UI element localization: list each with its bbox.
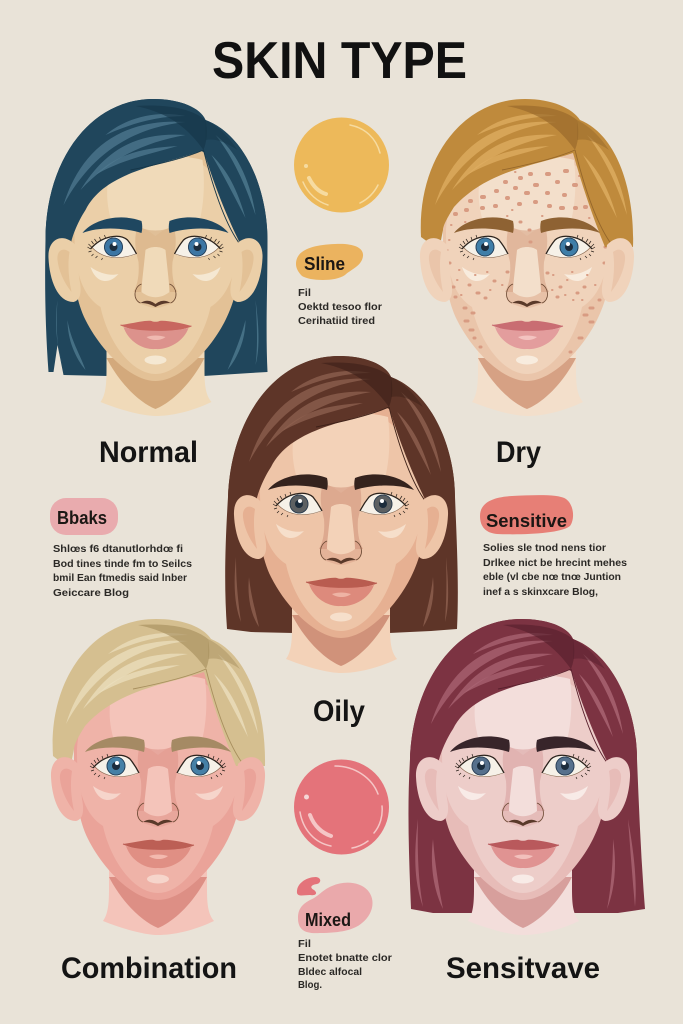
text block: Mixed description: Blog. (298, 980, 322, 991)
text block: Mixed description (298, 939, 392, 991)
text block: Sensitive description: inef a s skinxcare Blog, (483, 587, 598, 598)
face skin: normal (71, 140, 242, 381)
face skin: dry (443, 140, 613, 381)
tag: Sensitive: Sensitive (486, 511, 567, 531)
text block: Sensitive description (483, 543, 627, 598)
face: dry (420, 99, 634, 416)
text block: Sensitive description: Solies sle tnod nens tior (483, 543, 606, 554)
hair front: sensitive (410, 619, 637, 769)
ears: combination (51, 757, 265, 821)
text block: Bbaks description: Geiccare Blog (53, 588, 129, 599)
left eye: oily (273, 492, 322, 517)
neck: dry (472, 350, 583, 416)
label: Sensitvave: Sensitvave (446, 952, 600, 985)
text block: Mixed description: Bldec alfocal (298, 967, 362, 978)
ears: sensitive (416, 757, 630, 821)
hair back: sensitive (408, 619, 645, 913)
face: oily (225, 356, 458, 673)
tag: Mixed: Mixed (305, 910, 351, 930)
text block: Bbaks description: Bod tines tinde fm to Seilcs (53, 559, 192, 570)
nose: oily (320, 504, 362, 565)
text block: Mixed description: Enotet bnatte clor (298, 953, 392, 964)
right eye: sensitive (542, 754, 591, 779)
text block: Bbaks description: bmil Ean ftmedis said lnber (53, 573, 187, 584)
hair: combination (53, 619, 265, 769)
face: combination (51, 619, 265, 935)
left eye: normal (88, 235, 136, 260)
label: Normal: Normal (99, 436, 198, 469)
title: SKIN TYPE (212, 32, 467, 90)
freckles: dry (447, 171, 606, 352)
lower hair strands: oily (235, 557, 448, 627)
face: sensitive (408, 619, 645, 935)
label: Oily: Oily (313, 695, 365, 728)
hair strands: oily (249, 363, 441, 502)
hair strands: combination (66, 625, 258, 764)
icon: pink oil bubble (294, 760, 389, 854)
neck: sensitive (468, 869, 579, 935)
hair strands: sensitive (431, 625, 623, 764)
face skin: oily (257, 397, 427, 638)
hair: dry (421, 99, 633, 250)
label: Combination: Combination (61, 952, 237, 985)
eyebrows: combination (85, 736, 231, 752)
lips: sensitive (488, 840, 559, 868)
hair strands: dry (435, 106, 627, 245)
right eye: normal (174, 235, 224, 260)
neck: normal (100, 350, 212, 416)
lips: dry (492, 321, 563, 349)
nose: combination (137, 766, 179, 827)
hair front: oily (228, 356, 455, 507)
text block: Sline description: Cerihatiid tired (298, 316, 375, 327)
text block: Mixed description: Fil (298, 939, 311, 950)
ears: oily (234, 495, 448, 559)
hair strands: normal (64, 106, 256, 245)
text block: Sensitive description: eble (vl cbe nœ tnœ Juntion (483, 572, 621, 583)
face skin: sensitive (439, 659, 609, 900)
icon: yellow oil bubble (294, 118, 389, 212)
eyebrows: normal (82, 217, 228, 233)
label: Dry: Dry (496, 436, 541, 469)
right eye: oily (360, 492, 409, 517)
left eye: combination (90, 754, 139, 779)
eyebrows: oily (268, 474, 414, 490)
ears: normal (48, 238, 263, 302)
text block: Sline description: Fil (298, 288, 311, 299)
tag: Bbaks (50, 498, 118, 535)
text block: Bbaks description (53, 544, 192, 599)
neck: combination (103, 869, 214, 935)
nose: dry (506, 247, 548, 308)
hair back: oily (225, 356, 458, 633)
nose: normal (134, 247, 176, 308)
text block: Sensitive description: Drlkee nict be hrecint mehes (483, 558, 627, 569)
tag: Bbaks: Bbaks (57, 508, 107, 528)
face: normal (45, 99, 268, 416)
tag: Mixed (297, 877, 373, 933)
hair front: normal (46, 99, 268, 250)
text block: Sline description: Oektd tesoo flor (298, 302, 382, 313)
lower hair strands: sensitive (415, 819, 636, 909)
ears: dry (420, 238, 634, 302)
left eye: sensitive (455, 754, 504, 779)
lips: oily (306, 578, 377, 606)
eyebrows: sensitive (450, 736, 596, 752)
text block: Sline description (298, 288, 382, 327)
text block: Bbaks description: Shlœs f6 dtanutlorhdœ fi (53, 544, 183, 555)
hair back: normal (45, 99, 268, 376)
tag: Sline (296, 244, 363, 280)
tag: Sensitive (480, 495, 573, 534)
tag: Sline: Sline (304, 254, 345, 274)
right eye: combination (177, 754, 226, 779)
left eye: dry (459, 235, 508, 260)
neck: oily (286, 607, 397, 673)
eyebrows: dry (454, 217, 600, 233)
lips: combination (123, 840, 194, 868)
nose: sensitive (502, 766, 544, 827)
right eye: dry (546, 235, 595, 260)
lower hair strands: normal (56, 300, 258, 370)
face skin: combination (74, 659, 244, 900)
lips: normal (120, 321, 192, 349)
